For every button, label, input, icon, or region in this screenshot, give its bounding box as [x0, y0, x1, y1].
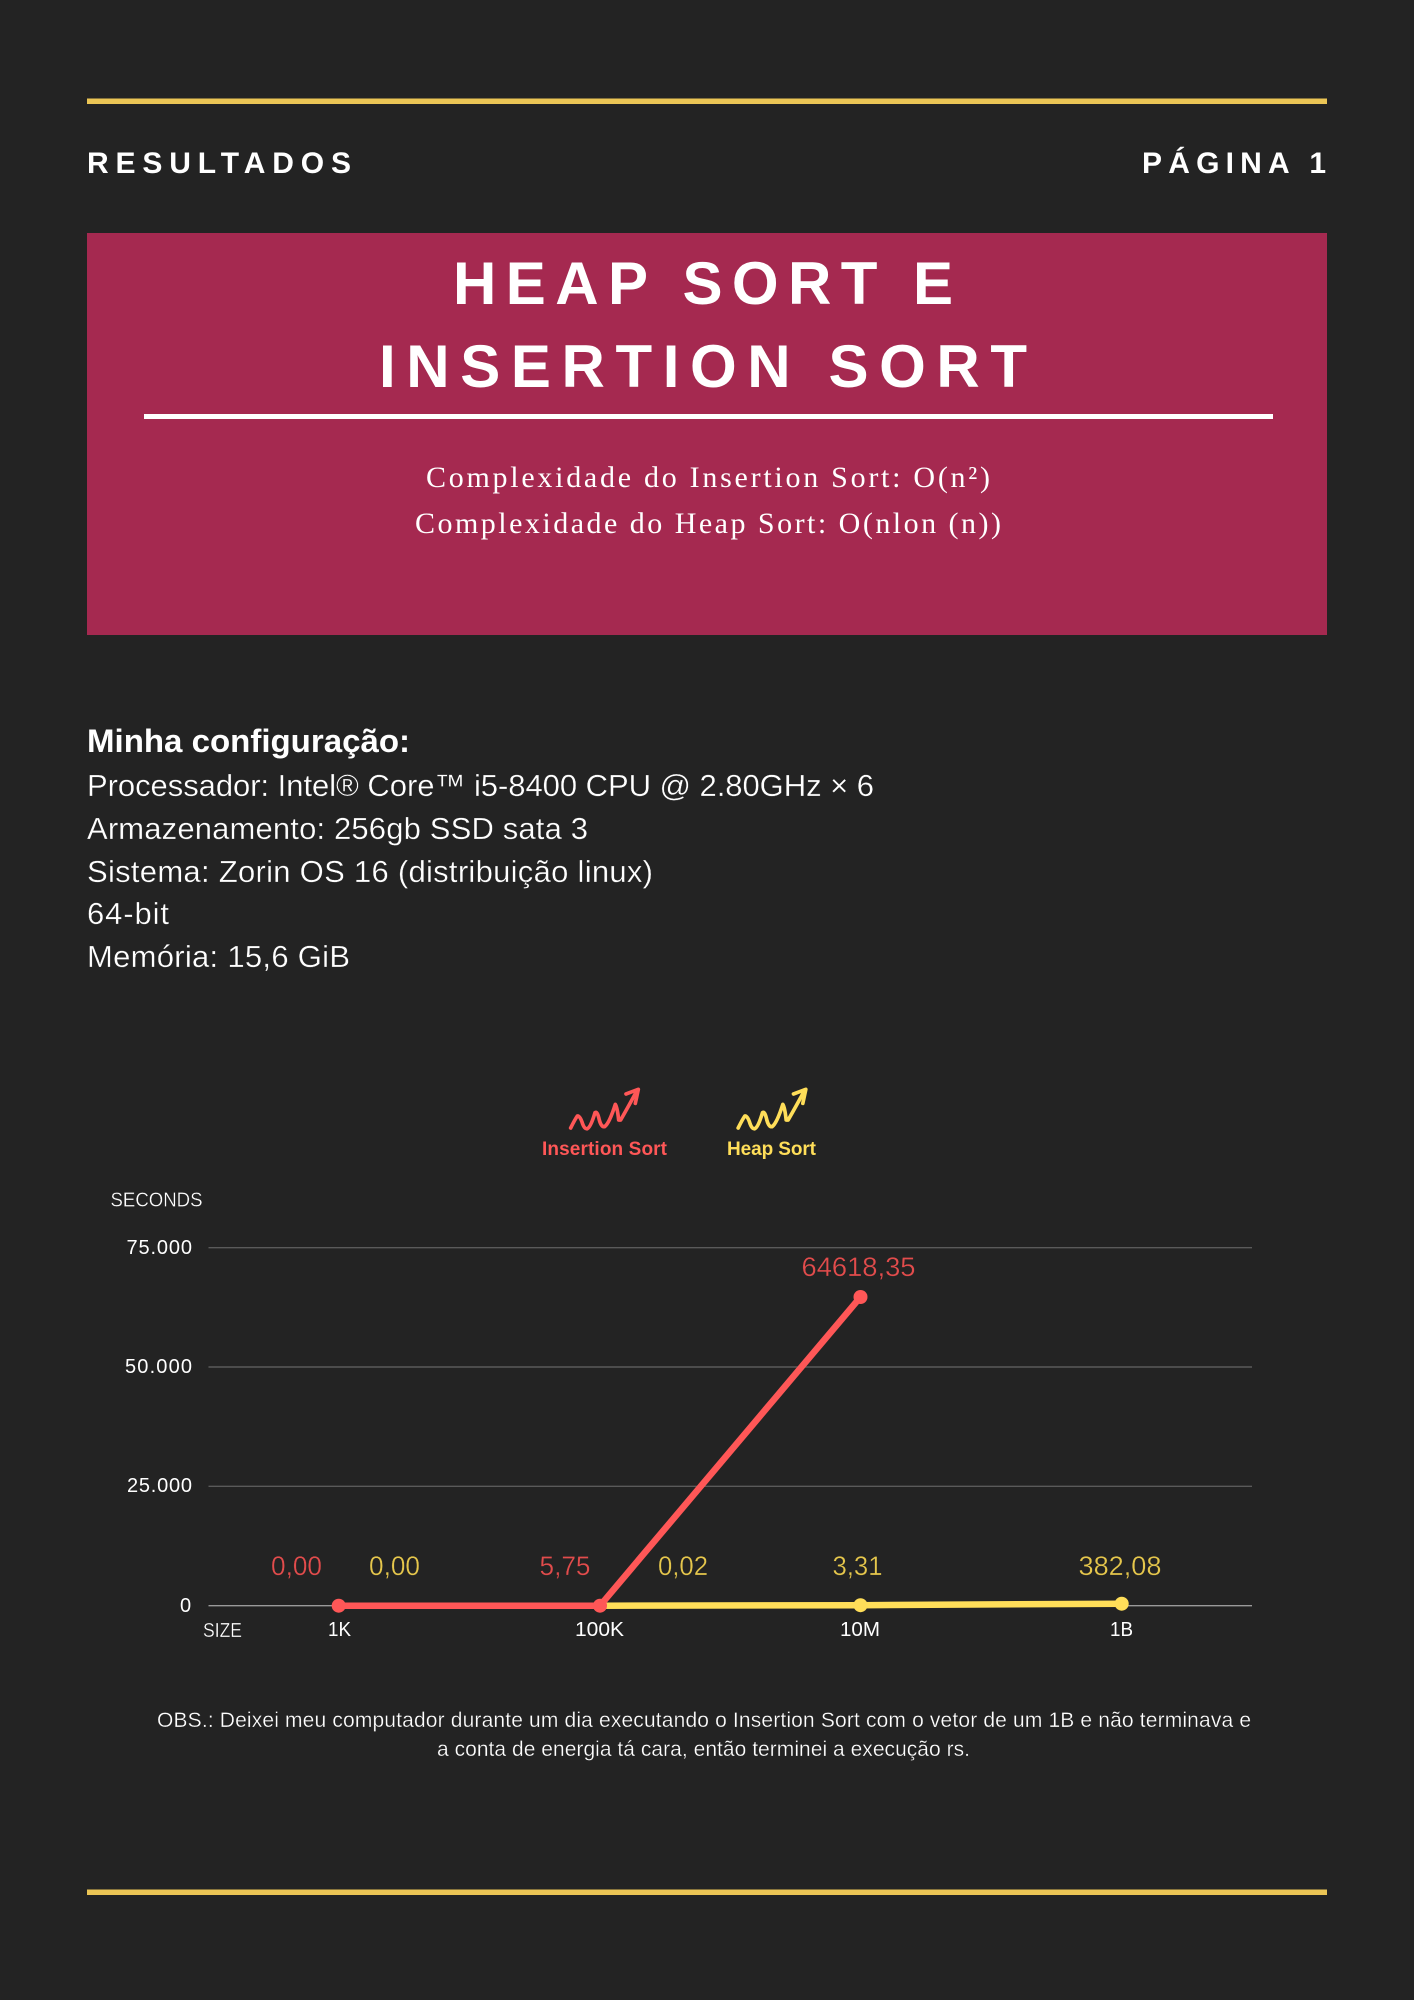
- data labels: heap sort: 3,31: [832, 1551, 882, 1581]
- bottom accent bar: [87, 1890, 1327, 1895]
- complexity text: Complexidade do Heap Sort: O(nlon (n)): [415, 507, 1001, 540]
- text block: configuration: 64-bit: [87, 896, 169, 931]
- complexity text: Complexidade do Insertion Sort: O(n²): [426, 461, 990, 494]
- x axis labels: 1B: [1110, 1619, 1133, 1641]
- y axis labels: [125, 1237, 192, 1617]
- x axis labels: 100K: [575, 1619, 625, 1641]
- x axis labels: 1K: [328, 1619, 352, 1641]
- title underline: [144, 414, 1273, 419]
- data labels: insertion sort: [271, 1252, 916, 1581]
- observation note: a conta de energia tá cara, então terminei a execução rs.: [437, 1738, 970, 1761]
- line chart: [110, 1190, 1252, 1642]
- text block: configuration: Memória: 15,6 GiB: [87, 939, 350, 974]
- y axis labels: 75.000: [126, 1237, 192, 1259]
- legend: insertion sort: [542, 1089, 668, 1160]
- gridlines: [208, 1248, 1252, 1606]
- y axis labels: 50.000: [125, 1356, 192, 1378]
- legend: insertion sort: Insertion Sort: [542, 1139, 668, 1160]
- x axis labels: SIZE: [203, 1620, 242, 1642]
- series: insertion sort line: [332, 1290, 868, 1613]
- title: [379, 250, 1027, 400]
- top accent bar: [87, 98, 1327, 104]
- text block: configuration: Sistema: Zorin OS 16 (distribuição linux): [87, 854, 653, 889]
- text block: configuration: Minha configuração:: [87, 723, 410, 759]
- x axis labels: 10M: [840, 1619, 880, 1641]
- panel: title banner: [87, 233, 1327, 635]
- legend: heap sort: Heap Sort: [727, 1139, 817, 1160]
- data labels: heap sort: 382,08: [1078, 1551, 1162, 1581]
- title: HEAP SORT E: [453, 250, 953, 317]
- header: section name: RESULTADOS: [87, 147, 351, 180]
- legend: heap sort: [727, 1089, 817, 1160]
- y axis labels: 25.000: [127, 1475, 192, 1497]
- y axis title: SECONDS: [110, 1190, 202, 1212]
- data labels: heap sort: 0,02: [658, 1551, 708, 1581]
- text block: configuration: Processador: Intel® Core™ i5-8400 CPU @ 2.80GHz × 6: [87, 768, 874, 803]
- chart legend: [542, 1089, 817, 1160]
- data labels: heap sort: 0,00: [369, 1551, 420, 1581]
- y axis labels: 0: [180, 1595, 191, 1617]
- x axis labels: [203, 1619, 1133, 1642]
- text block: configuration: Armazenamento: 256gb SSD sata 3: [87, 811, 588, 846]
- text block: configuration: [87, 723, 874, 974]
- icon: red rising arrow: [571, 1089, 638, 1129]
- data labels: heap sort: [369, 1551, 1162, 1581]
- icon: yellow rising arrow: [738, 1089, 806, 1129]
- data labels: insertion sort: 64618,35: [802, 1252, 916, 1282]
- series: heap sort line: [339, 1597, 1129, 1612]
- data labels: insertion sort: 5,75: [540, 1551, 590, 1581]
- observation note: [157, 1709, 1251, 1761]
- observation note: OBS.: Deixei meu computador durante um dia executando o Insertion Sort com o vetor de um 1B e não terminava e: [157, 1709, 1251, 1732]
- data labels: insertion sort: 0,00: [271, 1551, 322, 1581]
- header: page number: PÁGINA 1: [1142, 146, 1326, 180]
- complexity text: [415, 461, 1001, 540]
- title: INSERTION SORT: [379, 333, 1027, 400]
